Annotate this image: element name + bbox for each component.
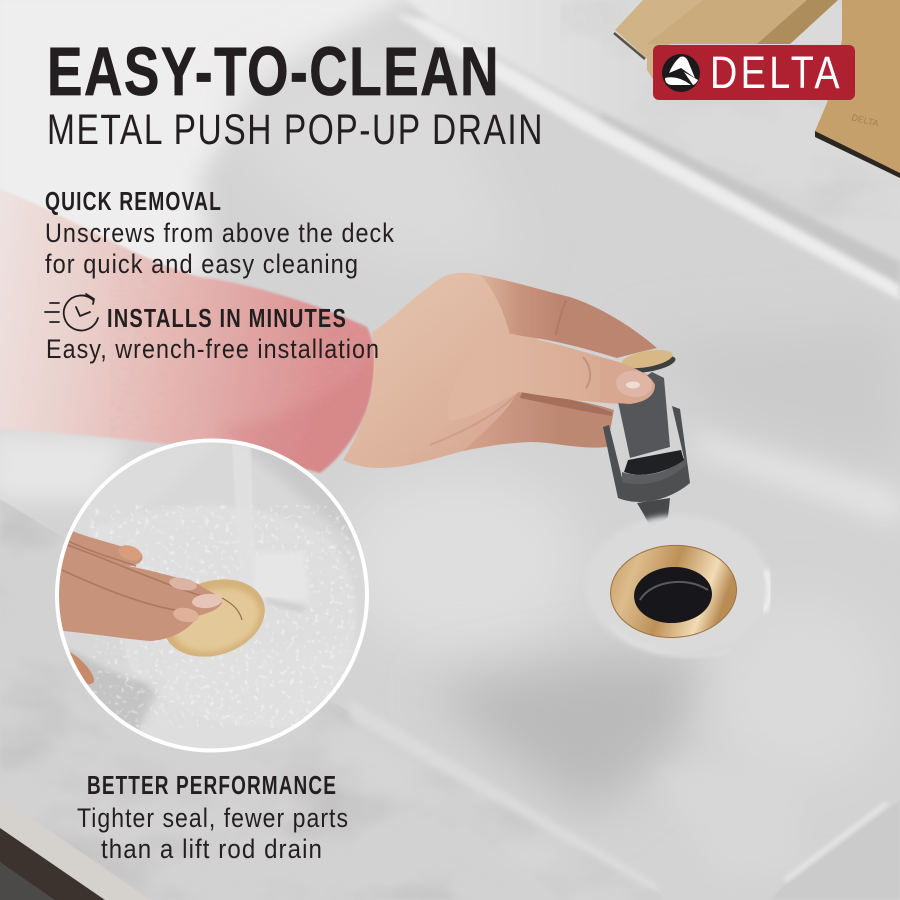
text block: installs in minutes: Easy, wrench-free installation [46,334,380,364]
marble counter: bottom right corner [770,800,900,900]
counter lip and cabinet [0,797,150,900]
thumb over stopper [600,357,655,404]
faucet [614,0,900,178]
hand: back and wrist [343,273,540,468]
text block: quick removal: for quick and easy cleaning [45,249,359,279]
drain [586,515,770,656]
hand: lower fingers [463,392,614,451]
marble counter: top right [395,0,900,300]
stopper: cap [627,352,677,376]
sleeve [0,180,385,480]
logo icon [662,54,700,92]
hand: index finger [480,275,657,358]
text block: installs in minutes [46,303,380,364]
stopper: tip [637,498,670,530]
text block: quick removal: QUICK REMOVAL [45,186,222,216]
icon: clock with motion lines [45,294,98,330]
inset circle [50,435,375,760]
text block: better performance: than a lift rod drain [101,834,323,864]
text block: better performance: Tighter seal, fewer parts [77,803,349,833]
text block: quick removal [45,186,395,279]
light patch [253,552,308,605]
faucet: DELTA [851,112,880,129]
stopper: body [617,372,670,458]
text block: installs in minutes: INSTALLS IN MINUTES [107,303,347,333]
water stream [234,446,251,504]
hand [343,273,657,468]
fingers [50,531,223,684]
stopper: frame [603,406,690,502]
text block: better performance: BETTER PERFORMANCE [87,770,337,800]
marble counter: bottom left [0,500,579,900]
water sheet [142,673,163,691]
stopper [603,347,690,530]
text block: better performance [77,770,349,864]
subtitle: METAL PUSH POP-UP DRAIN [47,106,544,154]
gold pop-up cap [166,579,265,657]
logo wordmark: DELTA [710,47,843,98]
logo: Delta [653,45,855,100]
title: EASY-TO-CLEAN [47,33,500,110]
text block: quick removal: Unscrews from above the deck [45,218,395,248]
water texture [90,505,356,727]
hand: thumb [448,330,655,420]
